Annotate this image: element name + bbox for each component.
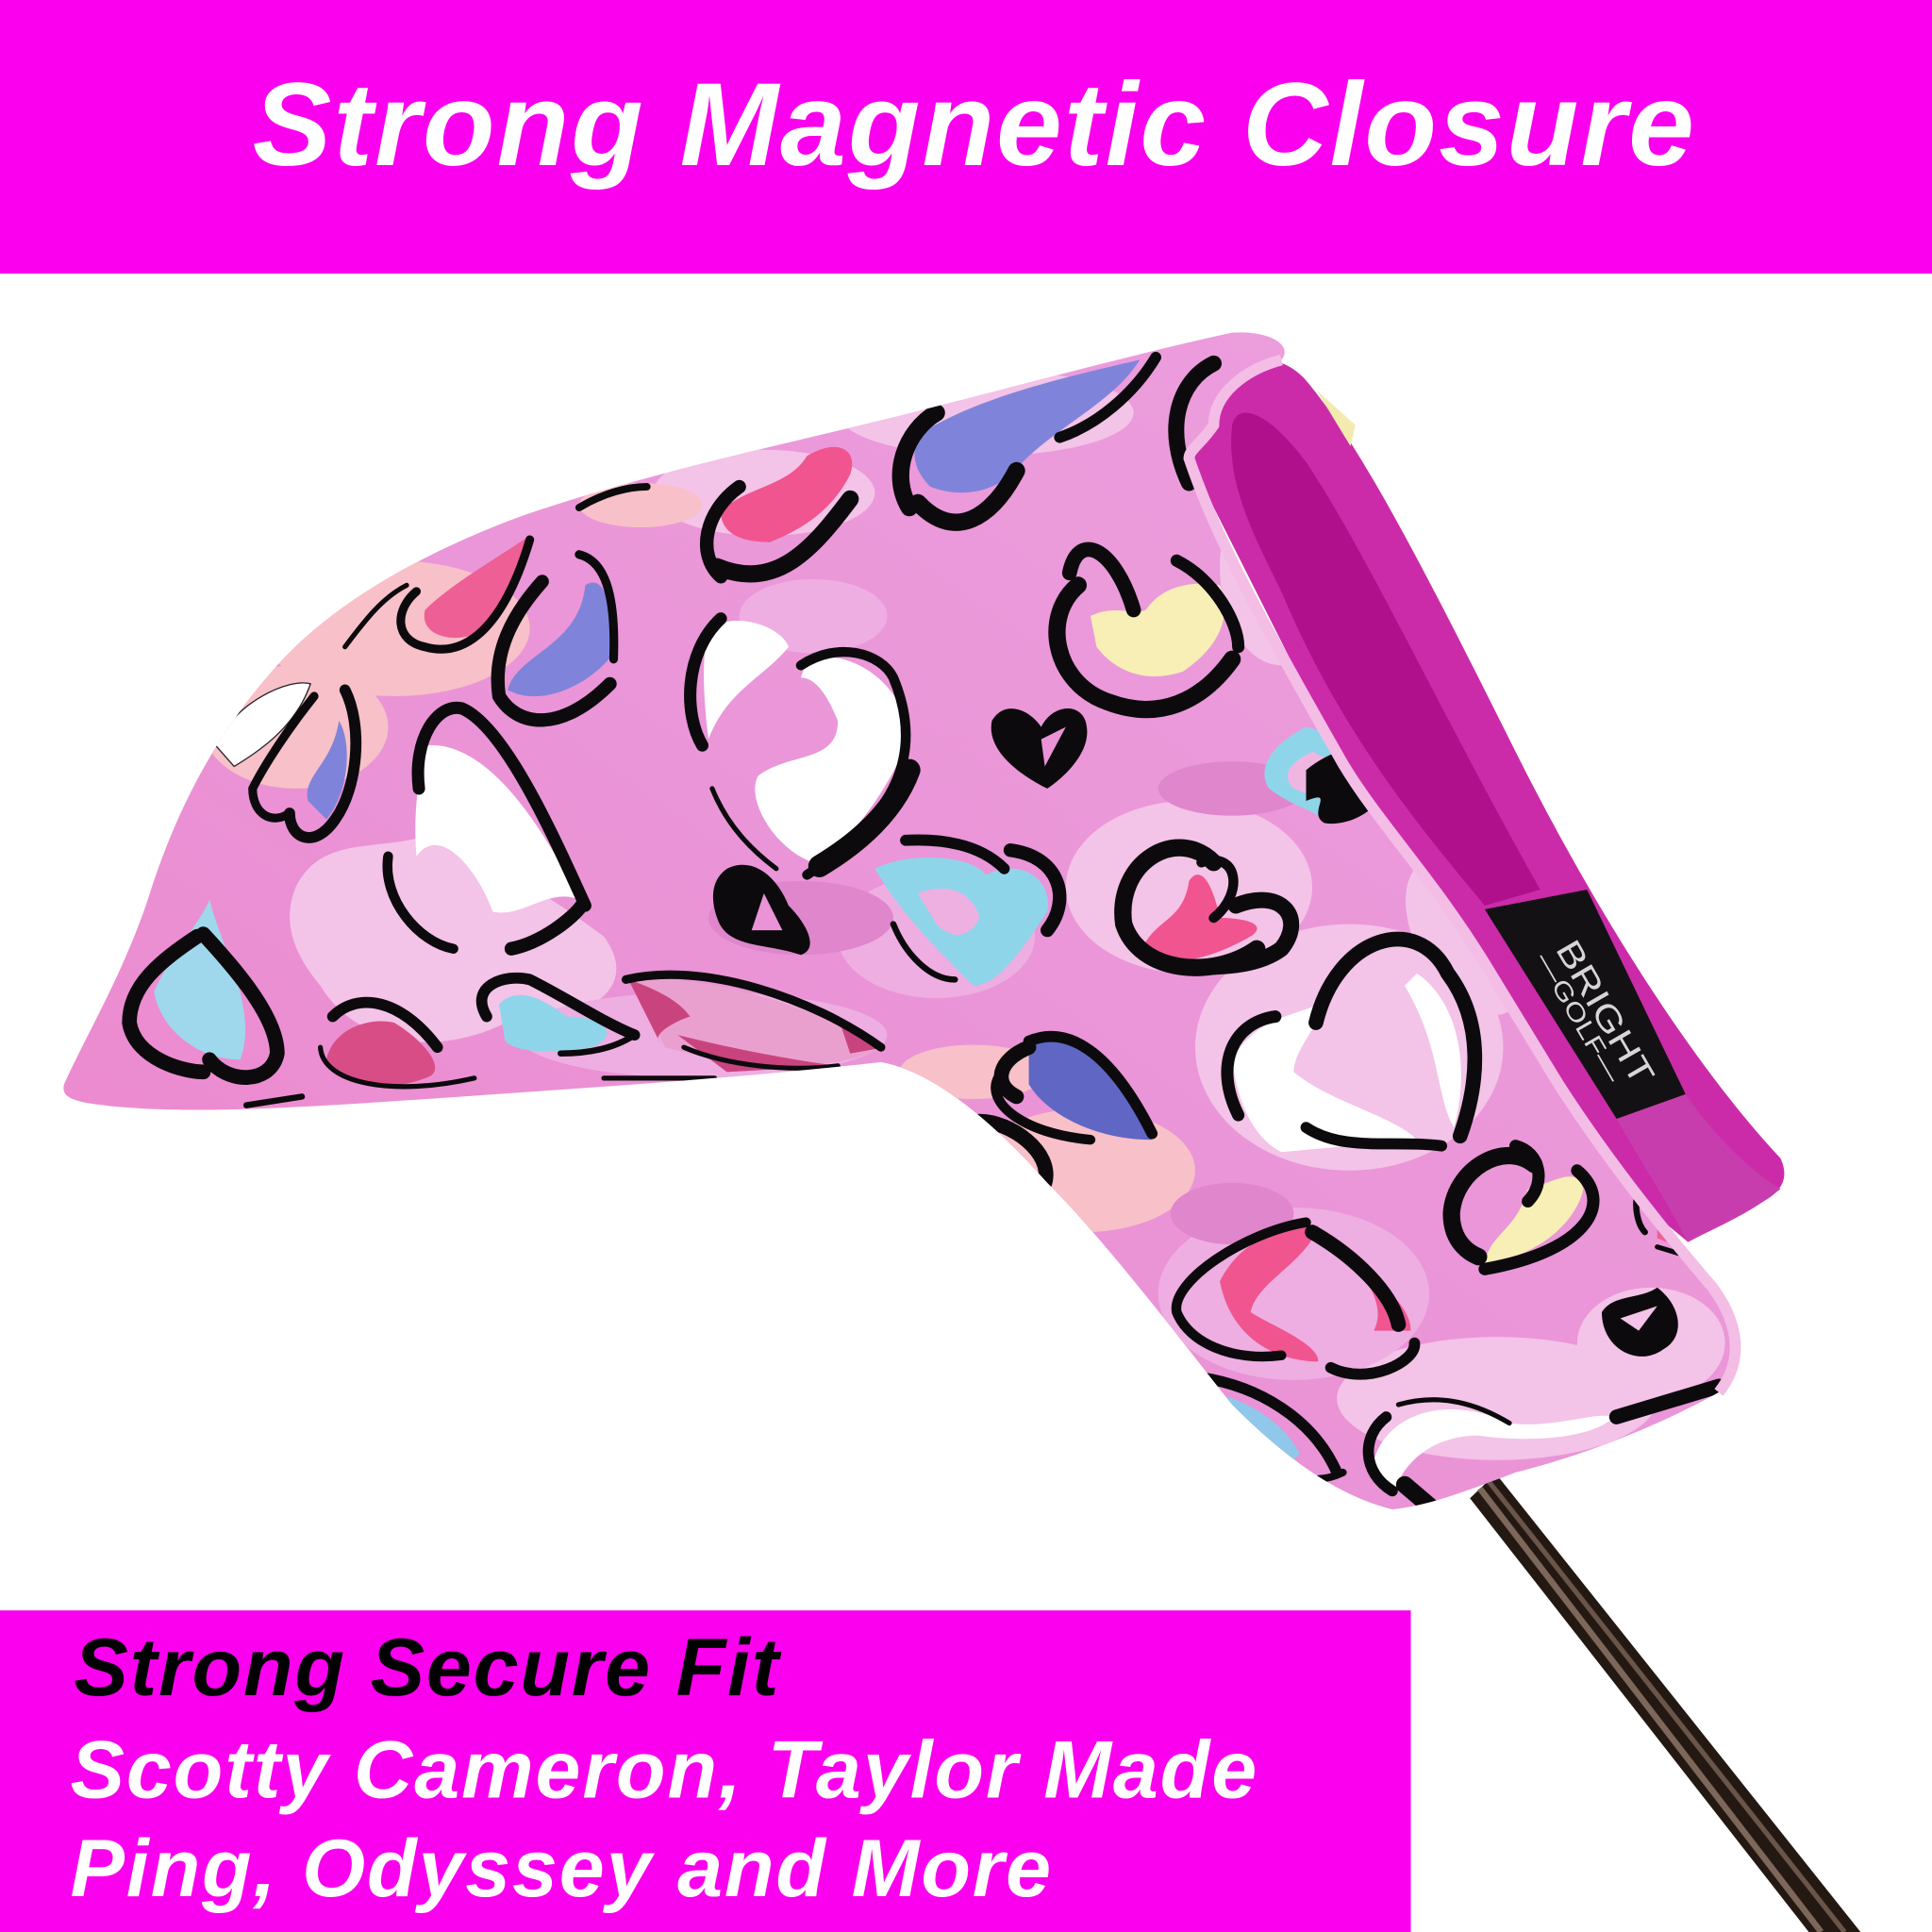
footer band — [0, 1610, 1411, 1932]
heart: cream — [1057, 549, 1239, 709]
heart: white centre — [691, 619, 909, 874]
heart: pink lower — [1176, 1223, 1415, 1374]
subtitle: Strong Secure Fit — [74, 1623, 782, 1713]
heart: white upper left — [216, 683, 310, 766]
heart: black bottom right — [1602, 1288, 1678, 1357]
heart: cream lower — [1452, 1146, 1593, 1269]
heart: blue tip — [129, 899, 277, 1077]
heart: lilac lower — [995, 1037, 1152, 1140]
heart: white right — [1227, 940, 1474, 1152]
heart: lilac top — [901, 358, 1156, 523]
heart: pink right — [1123, 848, 1291, 968]
heart: dark small lower — [979, 1122, 1046, 1183]
heart: pink upper left — [401, 537, 530, 649]
shaft — [1470, 1474, 1860, 1932]
title: Strong Magnetic Closure — [253, 58, 1694, 191]
peach blotches — [204, 483, 1195, 1232]
brands line one: Scotty Cameron, Taylor Made — [70, 1725, 1257, 1816]
velvet interior — [1231, 413, 1541, 906]
heart: black small — [991, 708, 1087, 789]
heart: lilac upper left — [498, 555, 614, 720]
edge marks on left and top — [246, 363, 1214, 1106]
heart: lilac left — [253, 690, 356, 838]
putter headcover — [63, 332, 1784, 1509]
heart: cyan bottom left — [482, 978, 635, 1054]
velvet lower strip — [1617, 1094, 1780, 1242]
darker blotches — [708, 761, 1306, 1244]
heart: cyan bottom — [1201, 1377, 1343, 1479]
cream heart peeking behind flap — [1316, 390, 1356, 446]
header band — [0, 0, 1932, 274]
heart: cyan right — [1264, 726, 1368, 824]
heart: pink top — [707, 447, 852, 576]
brands line two: Ping, Odyssey and More — [70, 1824, 1051, 1914]
pale blotches — [290, 370, 1725, 1460]
leather body — [63, 332, 1736, 1509]
heart: blue centre — [874, 840, 1059, 986]
pattern and hearts — [129, 358, 1725, 1506]
heart: black small centre — [713, 865, 810, 955]
heart: white left — [388, 708, 585, 949]
stitched rim — [1189, 359, 1736, 1392]
heart: pink wide — [604, 974, 885, 1078]
bright golf label: —GOLF— — [1530, 947, 1628, 1089]
bright golf label — [1485, 890, 1686, 1119]
heart: small far right — [1633, 1199, 1679, 1257]
bright golf label: BRIGHT — [1548, 933, 1662, 1091]
heart: pink bottom left — [321, 1003, 475, 1087]
medium blotches — [518, 579, 1429, 1380]
heart: white bottom — [1369, 1386, 1719, 1506]
velvet flap — [1189, 359, 1784, 1242]
